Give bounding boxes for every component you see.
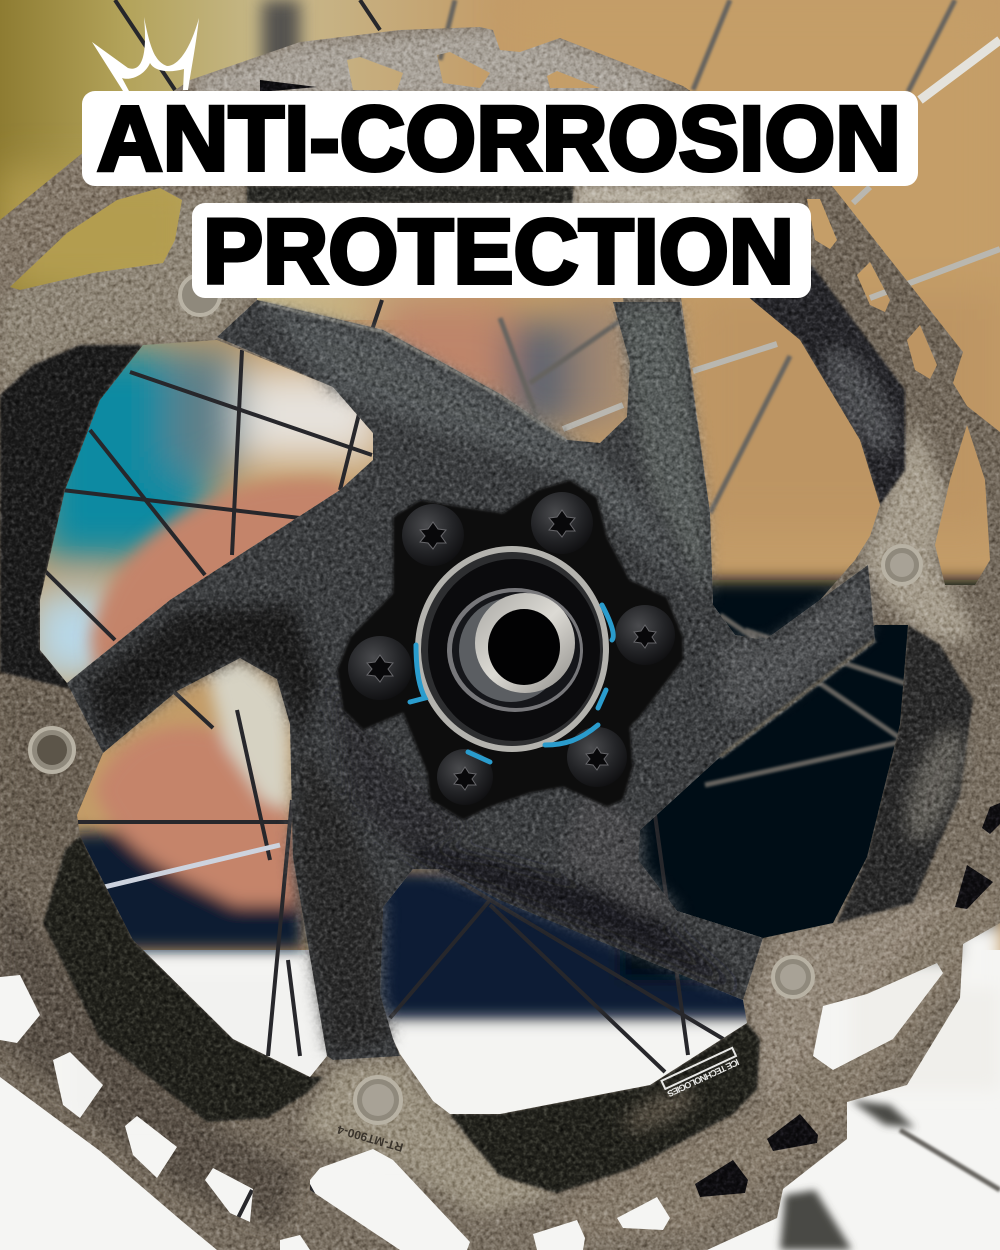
rivets [30,275,921,1123]
band: upper left [0,345,143,690]
title line 1: ANTI-CORROSION [97,88,901,190]
rotor printed text [335,1048,741,1155]
title line 2: PROTECTION [203,201,794,303]
spider worn edge highlight [260,302,565,440]
band: upper right [740,265,905,505]
band: right [837,625,973,923]
outer race [415,546,609,752]
bore [488,609,560,685]
hand [70,479,360,1115]
axle sleeve [459,598,563,702]
model number: RT-MT900-4 [335,1122,405,1155]
navy shadow region [370,580,1000,1155]
hub bearing [410,546,613,762]
inner race [447,588,583,712]
lower right dark blur [780,1100,915,1250]
blue anti-corrosion grease [410,605,613,762]
rotor black inner bands [0,186,973,1193]
dark blurred tube at top [262,0,300,70]
torx bolts [348,492,675,805]
spider shading [85,305,868,1055]
strip under title [247,186,573,203]
icon: crown logo [92,17,199,91]
rotor dark cooling holes [260,80,1000,1197]
logo: ICE TECHNOLOGIES [666,1057,741,1099]
bolt recess [337,480,683,820]
black seal [428,559,600,741]
spider carrier [67,300,875,1060]
title [82,88,918,303]
smudges on bands [618,337,976,1140]
band: bottom [450,1023,760,1193]
band: lower left [43,836,323,1122]
